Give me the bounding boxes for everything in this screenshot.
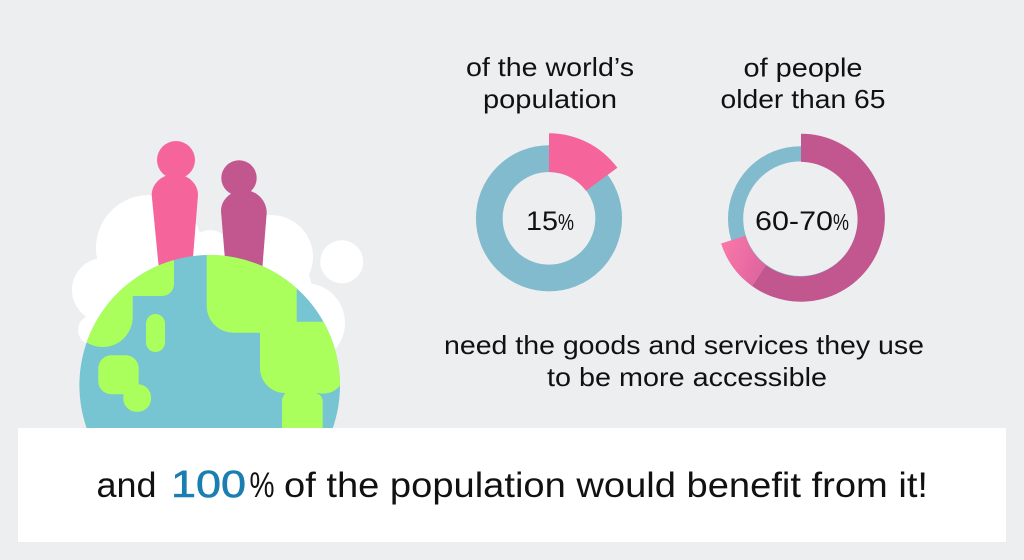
illustration: globe: [70, 250, 350, 428]
banner text: [96, 464, 928, 506]
illustration: clouds behind people: [72, 195, 363, 363]
value: 15%: [526, 206, 574, 236]
label: of the world's population: of the world’s: [466, 52, 634, 82]
value: 60-70%: %: [833, 209, 849, 235]
label: of people older than 65: of people: [744, 52, 862, 82]
icon: mauve person: [221, 160, 267, 272]
continents: [86, 255, 340, 428]
text: need the goods and services: to be more accessible: [547, 362, 827, 392]
label: of people older than 65: older than 65: [720, 84, 886, 114]
label: of the world's population: [466, 52, 634, 114]
banner text: 100: [171, 464, 246, 506]
icon: pink person: [152, 141, 198, 270]
value: 15%: %: [558, 209, 574, 235]
value: 15%: 15: [526, 206, 558, 236]
text: need the goods and services: [444, 330, 924, 392]
donut chart: 60-70%: [721, 134, 885, 302]
text: need the goods and services: need the goods and services they use: [444, 330, 924, 360]
label: of people older than 65: [720, 52, 886, 114]
banner text: and: [96, 466, 156, 505]
banner text: of the population would benefit from it!: [284, 466, 928, 505]
value: 60-70%: 60-70: [755, 206, 833, 236]
panel: bottom banner: [18, 428, 1006, 542]
banner text: %: [250, 466, 274, 505]
donut chart: 15%: [489, 133, 617, 278]
label: of the world's population: population: [483, 84, 617, 114]
